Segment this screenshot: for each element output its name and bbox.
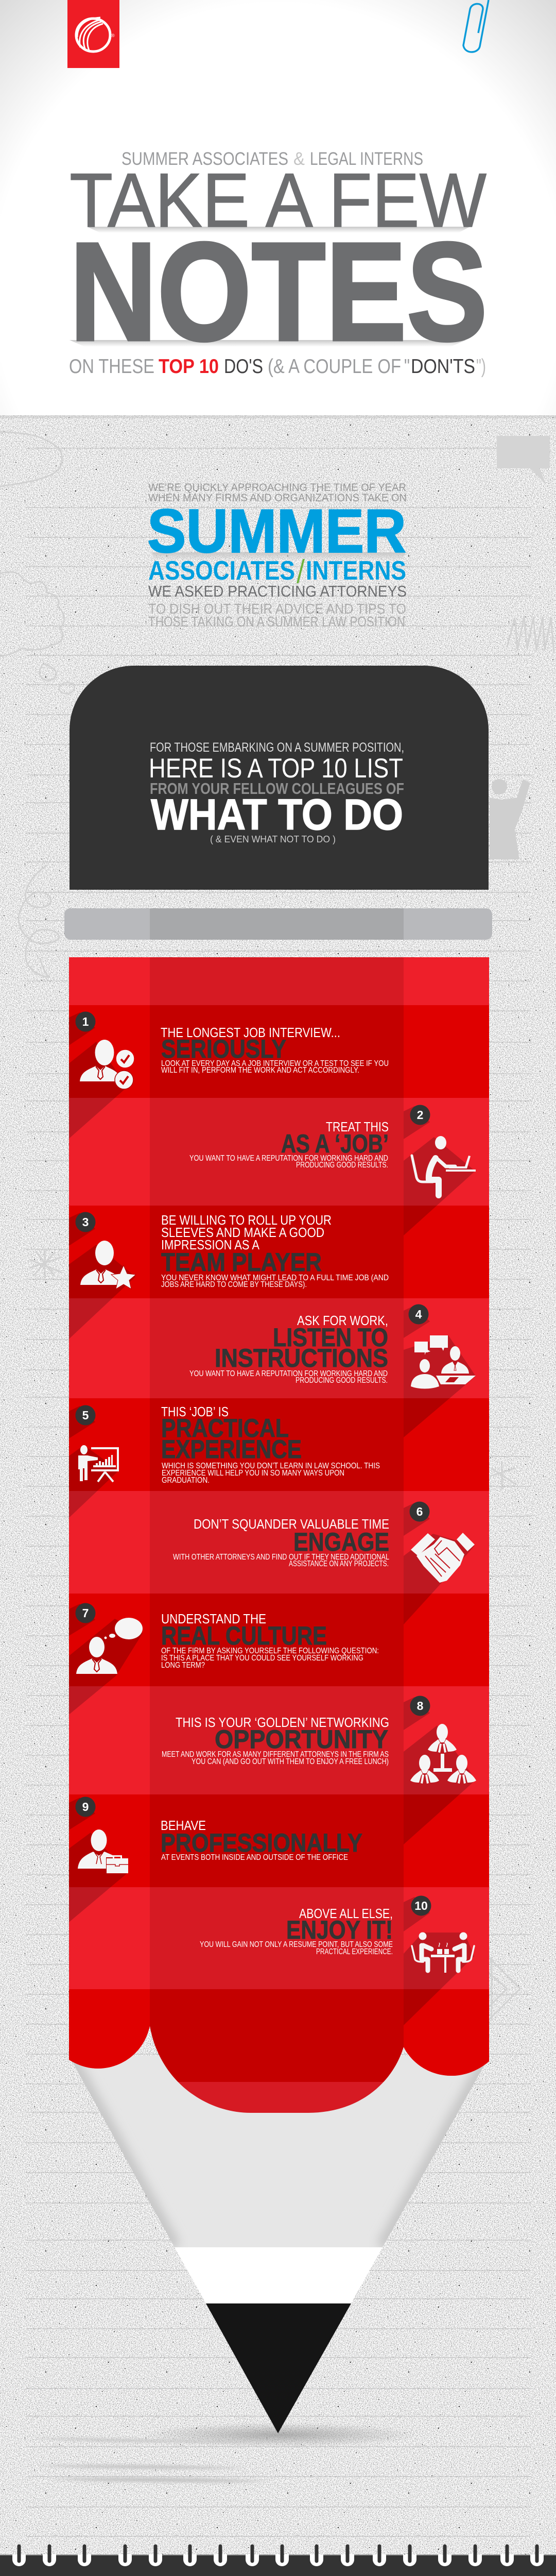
tip 7 text: REAL CULTURE — [161, 1621, 327, 1650]
tip 4 text: INSTRUCTIONS — [215, 1344, 388, 1372]
badge 10 — [411, 1896, 431, 1916]
panel: tip 7 — [69, 1603, 379, 1715]
eraser text — [149, 740, 404, 844]
tip 3 text: YOU NEVER KNOW WHAT MIGHT LEAD TO A FULL TIME JOB (AND — [161, 1274, 389, 1282]
panel: tip 3 — [69, 1212, 389, 1339]
badge 2 — [410, 1105, 430, 1125]
subtitle: TOP 10 — [159, 355, 219, 378]
badge 9 — [75, 1797, 96, 1817]
tip 6 text: WITH OTHER ATTORNEYS AND FIND OUT IF THEY NEED ADDITIONAL — [173, 1553, 389, 1562]
panel: header — [67, 0, 489, 378]
icon: person with star — [80, 1241, 136, 1289]
tip 5 text: THIS ‘JOB’ IS — [161, 1404, 229, 1419]
tip 4 text: PRODUCING GOOD RESULTS. — [296, 1376, 388, 1385]
eyebrow heading: SUMMER ASSOCIATES — [121, 149, 288, 169]
badge 9: 9 — [82, 1800, 89, 1814]
tip 1 text: SERIOUSLY — [161, 1035, 286, 1063]
tip 10 text: ENJOY IT! — [286, 1916, 393, 1944]
intro text block: ASSOCIATES — [148, 556, 295, 586]
tip 4 text: LISTEN TO — [273, 1323, 388, 1352]
tip 2 text: YOU WANT TO HAVE A REPUTATION FOR WORKING HARD AND — [189, 1154, 388, 1163]
icon: network of three people — [410, 1724, 476, 1784]
tip 6 text: DON’T SQUANDER VALUABLE TIME — [194, 1516, 389, 1532]
tip 7 text: LONG TERM? — [161, 1661, 205, 1670]
subtitle: DON'TS — [411, 355, 475, 378]
tip 8 text: THIS IS YOUR ‘GOLDEN’ NETWORKING — [176, 1715, 389, 1730]
badge 2: 2 — [417, 1108, 423, 1122]
tip 7 text: UNDERSTAND THE — [161, 1611, 266, 1626]
eyebrow heading — [121, 149, 423, 169]
icon: person with briefcase — [78, 1829, 128, 1873]
spiral binding — [12, 2546, 544, 2566]
subtitle — [69, 355, 486, 378]
icon: handshake — [411, 1533, 475, 1583]
intro text block: WE'RE QUICKLY APPROACHING THE TIME OF YEAR — [148, 482, 406, 494]
intro text block: WHEN MANY FIRMS AND ORGANIZATIONS TAKE ON — [148, 492, 407, 504]
intro text block: SUMMER — [147, 497, 406, 566]
tip 9 text: BEHAVE — [161, 1818, 206, 1833]
tip 2 text — [189, 1119, 389, 1170]
tip 5 text: EXPERIENCE — [161, 1435, 302, 1464]
title: take a few: TAKE A FEW — [70, 157, 486, 243]
tip 7 text: IS THIS A PLACE THAT YOU COULD SEE YOURSELF WORKING — [161, 1654, 363, 1663]
tip 1 text — [161, 1025, 389, 1075]
tip 4 text — [189, 1313, 388, 1385]
tip 6 text — [173, 1516, 389, 1568]
tip 5 text — [161, 1404, 380, 1485]
subtitle: " — [404, 355, 410, 378]
badge 6 — [410, 1501, 429, 1522]
panel: tip 4 — [189, 1304, 476, 1437]
tip 2 text: PRODUCING GOOD RESULTS. — [296, 1161, 388, 1170]
badge 8: 8 — [417, 1699, 424, 1713]
eyebrow heading: LEGAL INTERNS — [310, 149, 423, 169]
badge 1: 1 — [82, 1015, 89, 1028]
intro text block: TO DISH OUT THEIR ADVICE AND TIPS TO — [148, 601, 406, 617]
tip 3 text: TEAM PLAYER — [161, 1248, 322, 1277]
eyebrow heading: & — [293, 149, 305, 169]
panel: tip 8 — [162, 1696, 476, 1844]
tip 2 text: AS A ‘JOB’ — [281, 1129, 389, 1158]
tip 5 text: GRADUATION. — [162, 1476, 210, 1485]
tip 8 text: YOU CAN (AND GO OUT WITH THEM TO ENJOY A FREE LUNCH) — [192, 1757, 389, 1766]
tip 8 text: OPPORTUNITY — [215, 1725, 388, 1754]
tip 2 text: TREAT THIS — [326, 1119, 389, 1134]
tip 8 text — [162, 1715, 389, 1766]
panel: tip 1 — [69, 1012, 389, 1139]
badge 5 — [75, 1405, 96, 1425]
subtitle: DO'S — [224, 355, 263, 378]
panel: tip 9 — [69, 1797, 362, 1922]
tip 5 text: EXPERIENCE WILL HELP YOU IN SO MANY WAYS UPON — [162, 1469, 344, 1478]
tip 1 text: LOOK AT EVERY DAY AS A JOB INTERVIEW OR A TEST TO SEE IF YOU — [161, 1059, 389, 1068]
subtitle: (& A COUPLE OF — [268, 355, 401, 378]
tip 6 text: ASSISTANCE ON ANY PROJECTS. — [289, 1560, 389, 1568]
badge 10: 10 — [414, 1899, 428, 1912]
badge 5: 5 — [82, 1409, 89, 1422]
background sketches — [0, 432, 554, 2020]
tip 3 text — [161, 1212, 389, 1289]
intro text block: THOSE TAKING ON A SUMMER LAW POSITION — [148, 614, 405, 630]
subtitle: ON THESE — [69, 355, 154, 378]
tip 5 text: PRACTICAL — [161, 1414, 289, 1443]
icon: LexisNexis logo — [67, 0, 119, 68]
tip 3 text: BE WILLING TO ROLL UP YOUR — [161, 1212, 332, 1228]
badge 4 — [409, 1304, 428, 1324]
tip 10 text: YOU WILL GAIN NOT ONLY A RESUME POINT, BUT ALSO SOME — [200, 1940, 393, 1949]
tip 4 text: YOU WANT TO HAVE A REPUTATION FOR WORKING HARD AND — [189, 1369, 388, 1378]
tip 3 text: JOBS ARE HARD TO COME BY THESE DAYS). — [161, 1280, 307, 1289]
tip shadow — [31, 2422, 420, 2482]
title: notes: NOTES — [70, 213, 488, 370]
tip 10 text: ABOVE ALL ELSE, — [299, 1906, 393, 1921]
badge 8 — [410, 1696, 430, 1716]
tip 5 text: WHICH IS SOMETHING YOU DON’T LEARN IN LAW SCHOOL. THIS — [162, 1462, 380, 1470]
tip 9 text: PROFESSIONALLY — [161, 1828, 362, 1857]
icon: LexisNexis logo: ® — [111, 33, 115, 38]
icon: person at laptop — [412, 1136, 476, 1195]
panel: tip 2 — [189, 1105, 476, 1235]
icon: person with check marks — [80, 1040, 134, 1089]
header background — [0, 0, 556, 415]
tip 10 text — [200, 1906, 393, 1956]
eraser text: HERE IS A TOP 10 LIST — [149, 753, 403, 784]
panel: pencil eraser — [70, 666, 489, 890]
tip 9 text: AT EVENTS BOTH INSIDE AND OUTSIDE OF THE OFFICE — [161, 1853, 348, 1862]
icon: person with thought bubble — [76, 1618, 143, 1674]
panel: tip 10 — [200, 1896, 474, 2025]
tip 4 text: ASK FOR WORK, — [297, 1313, 388, 1328]
eraser text: FROM YOUR FELLOW COLLEAGUES OF — [150, 779, 404, 798]
badge 7: 7 — [82, 1606, 89, 1620]
tip 3 text: SLEEVES AND MAKE A GOOD — [161, 1225, 324, 1240]
tip 8 text: MEET AND WORK FOR AS MANY DIFFERENT ATTORNEYS IN THE FIRM AS — [162, 1750, 389, 1759]
tip 1 text: WILL FIT IN, PERFORM THE WORK AND ACT ACCORDINGLY. — [161, 1066, 359, 1075]
tip 9 text — [161, 1818, 362, 1862]
pencil ferrule — [64, 908, 492, 940]
panel: tip 5 — [69, 1404, 380, 1518]
badge 4: 4 — [415, 1308, 422, 1321]
intro text block — [147, 482, 407, 630]
tip 7 text: OF THE FIRM BY ASKING YOURSELF THE FOLLOWING QUESTION: — [161, 1647, 379, 1655]
eraser text: WHAT TO DO — [151, 790, 403, 839]
icon: two people at coffee table — [412, 1932, 474, 1973]
pencil body — [69, 957, 489, 2122]
tip 7 text — [161, 1611, 379, 1670]
icon: paperclip — [463, 0, 489, 52]
icon: presenter at board — [78, 1445, 118, 1482]
panel: footer — [0, 2544, 556, 2576]
tip 10 text: PRACTICAL EXPERIENCE. — [316, 1947, 393, 1956]
icon: conversation at a desk — [411, 1335, 476, 1389]
intro text block: WE ASKED PRACTICING ATTORNEYS — [148, 582, 407, 600]
badge 3 — [75, 1212, 96, 1232]
badge 1 — [75, 1012, 96, 1031]
eraser text: ( & EVEN WHAT NOT TO DO ) — [210, 834, 336, 844]
badge 7 — [75, 1603, 96, 1623]
tip 3 text: IMPRESSION AS A — [161, 1237, 260, 1252]
panel: tip 6 — [173, 1501, 475, 1624]
pencil tip — [69, 2056, 490, 2433]
subtitle: ") — [476, 355, 486, 378]
eraser text: FOR THOSE EMBARKING ON A SUMMER POSITION, — [150, 740, 404, 755]
intro text block: INTERNS — [306, 556, 406, 586]
badge 3: 3 — [82, 1215, 89, 1229]
tip 6 text: ENGAGE — [293, 1528, 389, 1556]
tip 1 text: THE LONGEST JOB INTERVIEW... — [161, 1025, 340, 1040]
badge 6: 6 — [416, 1505, 423, 1518]
